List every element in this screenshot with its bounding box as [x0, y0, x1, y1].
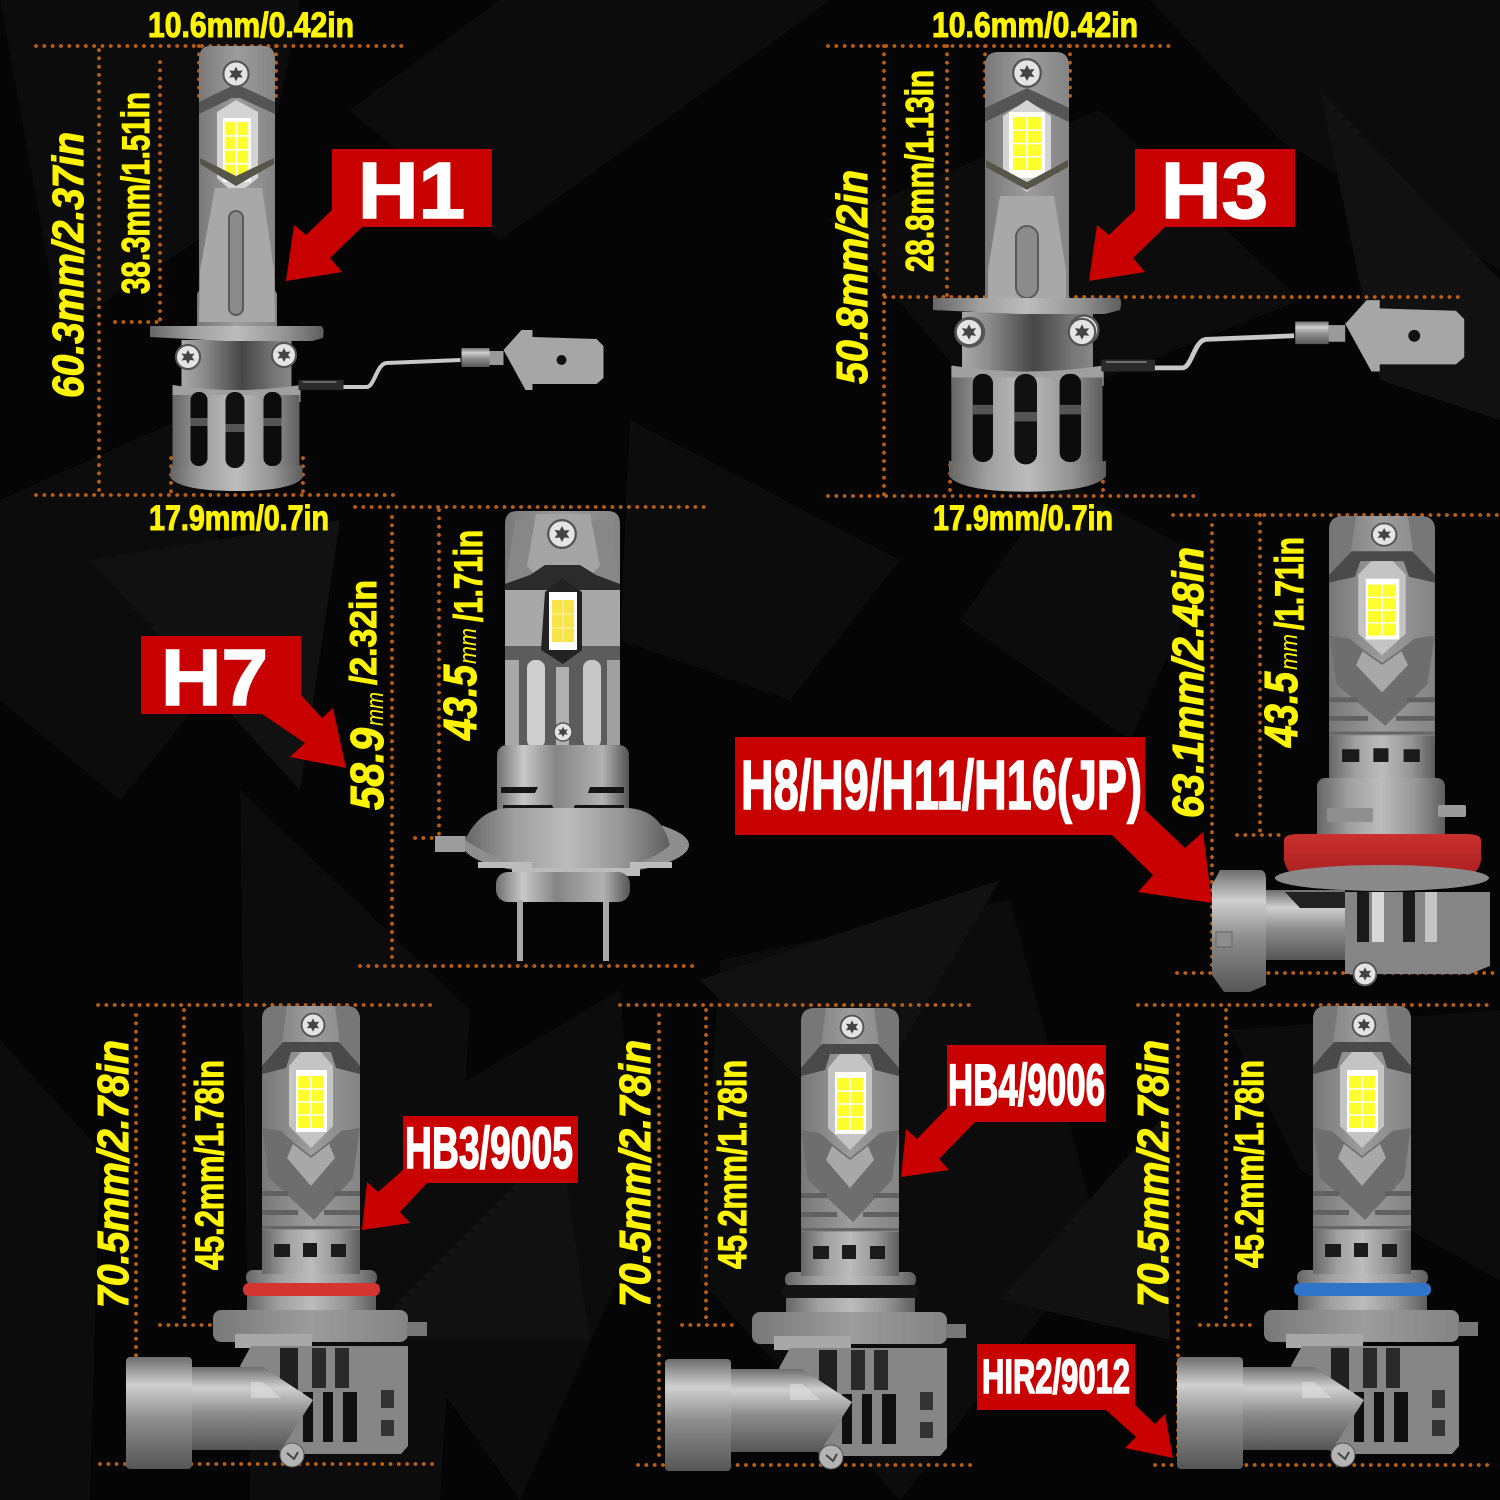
dimension text: HB4: 45.2mm/1.78in [711, 1060, 755, 1269]
label: HIR2/9012: HIR2/9012 [982, 1351, 1130, 1404]
dimension text: HIR2: 70.5mm/2.78in [1129, 1040, 1178, 1307]
dimension text: H7: 58.9 [341, 728, 393, 810]
dimension text: H1: 38.3mm/1.51in [115, 92, 158, 294]
bulb: HIR2/9012 [1177, 1006, 1478, 1469]
dimension text: H3: 17.9mm/0.7in [933, 499, 1113, 538]
label: HB3/9005: HB3/9005 [405, 1116, 573, 1181]
dimension text: H1: 10.6mm/0.42in [148, 6, 354, 45]
dimension text: H8/H9/H11/H16: 43.5 [1255, 671, 1307, 748]
dimension text: HB4 [611, 1040, 755, 1307]
dimension text: H1 [44, 6, 354, 538]
bulb: HB3/9005 [126, 1006, 427, 1469]
label: H3 [1089, 146, 1295, 281]
dimension text: HB3: 70.5mm/2.78in [89, 1040, 138, 1308]
label: H3: H3 [1161, 146, 1268, 235]
label: HB4/9006 [901, 1045, 1106, 1177]
label: H8/H9/H11/H16(JP) [735, 737, 1212, 903]
label: H1: H1 [358, 146, 465, 235]
bulb: H1 [150, 46, 604, 491]
dimension text: H7: 43.5 [434, 664, 486, 741]
dimension text: H3 [828, 6, 1138, 538]
dimension text: HB4: 70.5mm/2.78in [611, 1040, 660, 1307]
label: H7: H7 [161, 633, 268, 722]
dimension text: H3: 10.6mm/0.42in [932, 6, 1138, 45]
dimension text: H8/H9/H11/H16 [1164, 537, 1312, 818]
dimension text: H7: /2.32in [343, 580, 384, 685]
dimension text: H1: 60.3mm/2.37in [44, 132, 93, 398]
label: H8/H9/H11/H16(JP): H8/H9/H11/H16(JP) [741, 746, 1142, 824]
label: HIR2/9012 [977, 1344, 1173, 1458]
dimension text: H8/H9/H11/H16: 63.1mm/2.48in [1164, 547, 1213, 818]
dimension text: H7: mm [362, 692, 389, 726]
dimension text: H1: 17.9mm/0.7in [149, 499, 329, 538]
dimension text: H8/H9/H11/H16: /1.71in [1268, 537, 1312, 630]
dimension text: H7 [341, 530, 491, 810]
label: HB3/9005 [362, 1116, 578, 1230]
dimension text: HIR2: 45.2mm/1.78in [1228, 1060, 1272, 1268]
label: HB4/9006: HB4/9006 [948, 1053, 1105, 1118]
label: H1 [286, 146, 492, 281]
bulb: HB4/9006 [665, 1008, 966, 1471]
bulb: H7 [435, 511, 689, 961]
dimension text: H3: 28.8mm/1.13in [899, 70, 942, 272]
dimension text: HB3 [89, 1040, 232, 1308]
dimension text: H3: 50.8mm/2in [828, 170, 877, 384]
dimension text: HIR2 [1129, 1040, 1272, 1307]
label: H7 [141, 633, 346, 768]
dimension text: HB3: 45.2mm/1.78in [188, 1060, 232, 1270]
bulb: H3 [933, 52, 1464, 492]
dimension text: H7: mm [455, 628, 482, 664]
bulb: H8/H9/H11/H16 [1212, 516, 1490, 992]
dimension text: H7: /1.71in [447, 530, 491, 622]
dimension text: H8/H9/H11/H16: mm [1276, 634, 1303, 670]
